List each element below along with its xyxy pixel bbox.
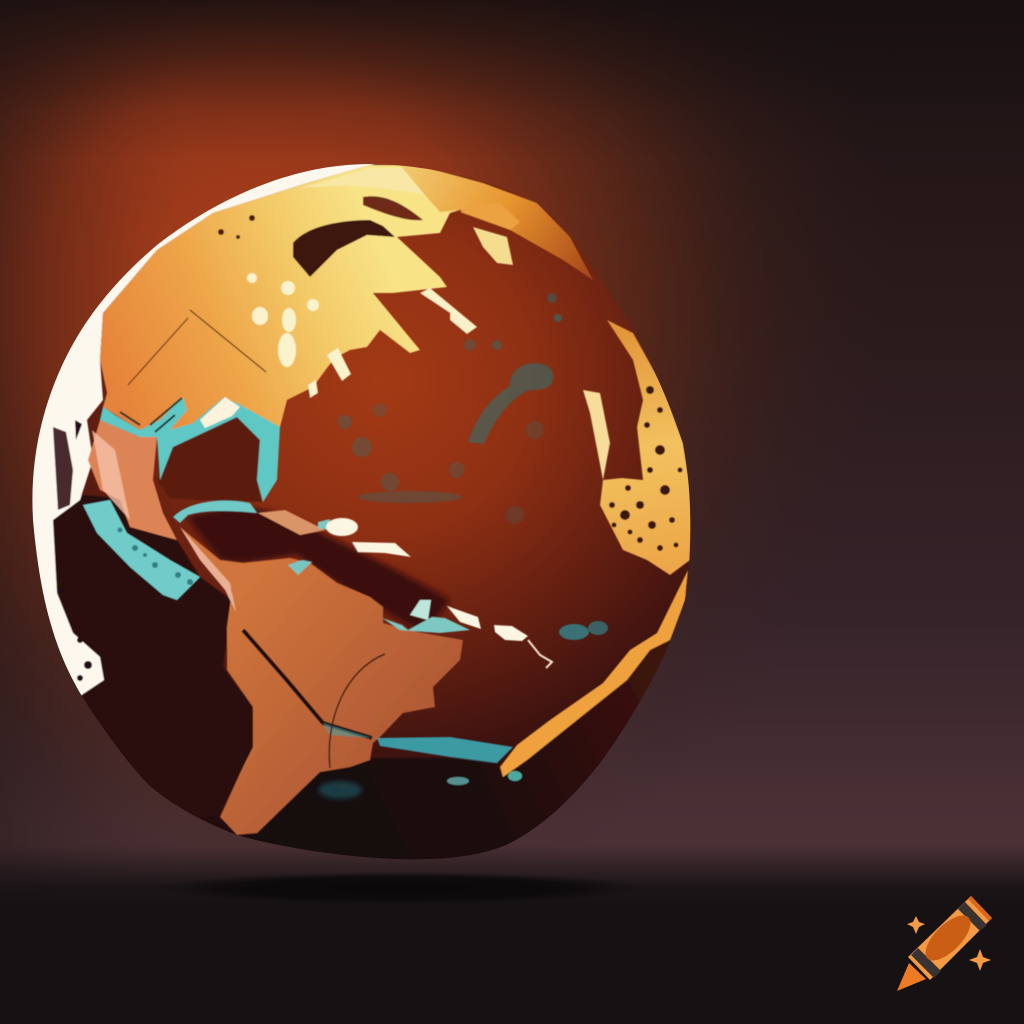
salmon central land (88, 420, 177, 540)
south america land (180, 527, 463, 835)
white lakes (247, 273, 351, 398)
south sea teal glow (318, 781, 362, 799)
dark western hemisphere (45, 495, 253, 820)
orange crescent lower east (500, 570, 688, 777)
teal river (377, 737, 513, 763)
ground shadow (155, 872, 645, 904)
yellow north land (100, 165, 460, 432)
east rim speckles (609, 386, 682, 551)
arctic land strip (400, 165, 593, 280)
white peninsula (420, 288, 477, 334)
pale strip beside caribbean (258, 510, 325, 535)
teal ocean patches (338, 293, 562, 524)
sparkle small (907, 916, 925, 934)
gulf bay dark (157, 417, 262, 502)
island: pale polygon (473, 227, 513, 265)
globe sphere (32, 164, 690, 859)
sparkle large (969, 949, 991, 971)
east rim land (600, 320, 692, 575)
teal arc (173, 501, 257, 523)
fine lines on land (128, 310, 266, 385)
white coast highlight (200, 397, 240, 428)
globe (20, 130, 692, 870)
brazil coast line (243, 630, 372, 738)
cream highlight top of land (300, 168, 430, 195)
dark southern sea (237, 585, 692, 870)
crayon body (897, 896, 992, 991)
white polar rim (32, 164, 377, 696)
teal west band (83, 500, 200, 600)
pale islands (288, 560, 312, 575)
dark fronds on coast (120, 398, 182, 432)
logo: crayon with sparkles (897, 896, 992, 991)
rim dark marks (53, 427, 73, 510)
teal band flecks (118, 528, 193, 585)
east sliver (583, 390, 610, 480)
dark caribbean band (187, 509, 450, 635)
teal coast (100, 397, 280, 502)
inland sea (293, 220, 395, 277)
